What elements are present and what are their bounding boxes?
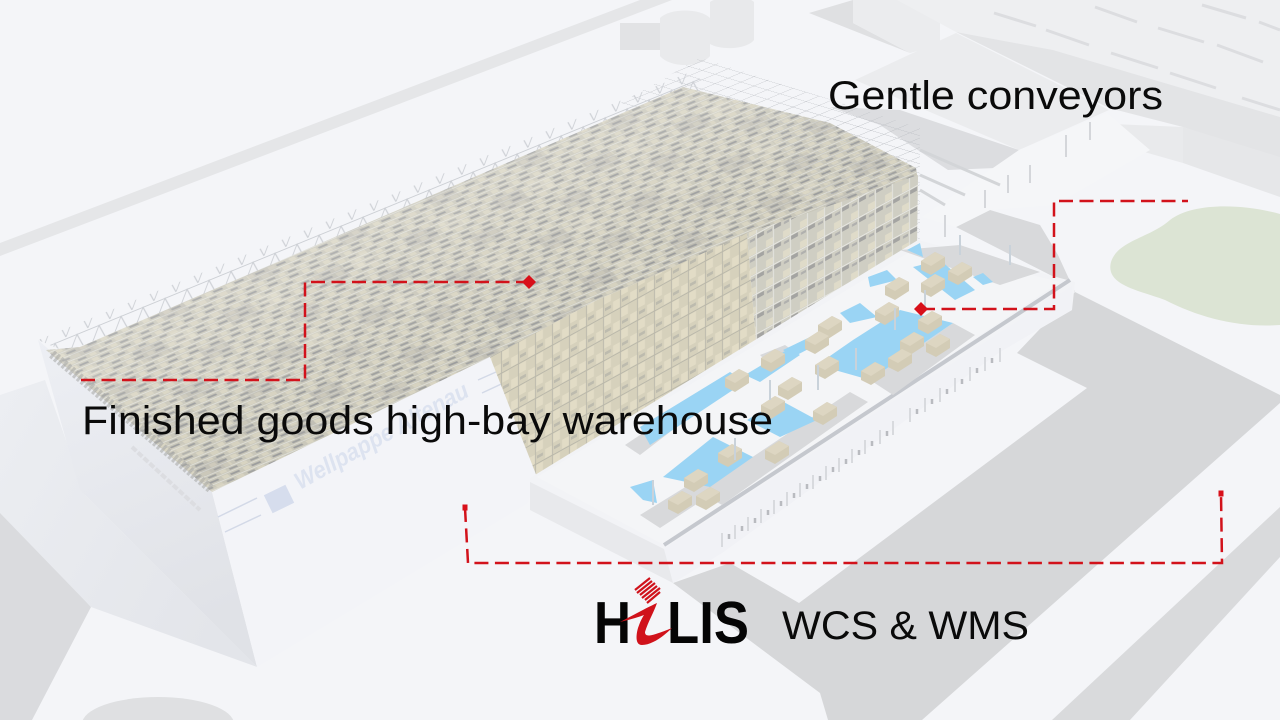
logo red swoosh i <box>620 603 672 645</box>
callout line: WCS and WMS <box>462 490 1224 563</box>
goods boxes <box>668 252 972 514</box>
low conveyor hall <box>530 235 1075 583</box>
gray patch lower left <box>0 510 91 720</box>
wall logo text: Wellpappe Altenau <box>290 377 474 495</box>
roof truss along back edge <box>38 68 700 352</box>
tall rack face <box>490 175 918 477</box>
roof skylights <box>994 5 1280 110</box>
foundation strip <box>75 485 257 667</box>
middle building shadow <box>830 107 1019 170</box>
rack roof top view <box>46 87 918 492</box>
blue conveyor zones <box>630 243 993 503</box>
callout marker <box>522 275 536 289</box>
scaffold over rack corner <box>760 100 920 235</box>
support posts <box>945 122 1090 237</box>
logo letters LIS: LIS <box>667 590 749 656</box>
front wall <box>212 357 537 667</box>
white slab <box>922 113 1150 227</box>
logo letter H: H <box>594 590 631 656</box>
bridge conveyors <box>920 150 1000 205</box>
building shadow <box>0 380 257 667</box>
roof shadow band <box>956 32 1280 160</box>
left wall <box>38 340 257 667</box>
gray lane lower right <box>1052 507 1280 720</box>
factory buildings upper right <box>809 0 1280 237</box>
callout line: gentle conveyors <box>914 201 1188 316</box>
logo red brush mark <box>635 578 660 603</box>
shadowed factory wall <box>809 0 910 53</box>
rack left edge streak <box>52 354 212 490</box>
label: finished goods high-bay warehouse: Finished goods high-bay warehouse <box>82 399 773 443</box>
shaded yard <box>1090 123 1183 163</box>
corner wall <box>530 482 673 583</box>
wall logo mark <box>264 485 294 513</box>
label: WCS and WMS: WCS & WMS <box>782 604 1029 648</box>
main factory roof <box>897 0 1280 117</box>
front wall of hall <box>664 286 1072 583</box>
annex building <box>1183 127 1280 197</box>
callout marker right <box>1218 490 1224 496</box>
label: gentle conveyors: Gentle conveyors <box>828 74 1163 118</box>
warehouse walls <box>38 340 537 667</box>
interior posts <box>653 235 1010 505</box>
green lawn <box>1110 206 1280 326</box>
diagonal road upper left <box>0 0 672 256</box>
gray patch beside hall <box>956 210 1075 292</box>
dock doors <box>722 348 1000 547</box>
upper scaffold <box>620 58 920 245</box>
middle building roof <box>855 33 1109 150</box>
roof rail front <box>664 280 1070 545</box>
silos <box>620 0 754 65</box>
hall floor <box>537 247 1060 545</box>
gray patch bottom <box>82 697 234 720</box>
gray floor strips <box>625 245 1040 528</box>
callout marker left <box>462 504 468 510</box>
main gray road <box>673 292 1280 720</box>
callout marker <box>914 302 928 316</box>
callout line: high-bay warehouse <box>81 275 536 380</box>
HiLIS logo <box>594 578 749 656</box>
wall side lettering <box>132 447 200 510</box>
